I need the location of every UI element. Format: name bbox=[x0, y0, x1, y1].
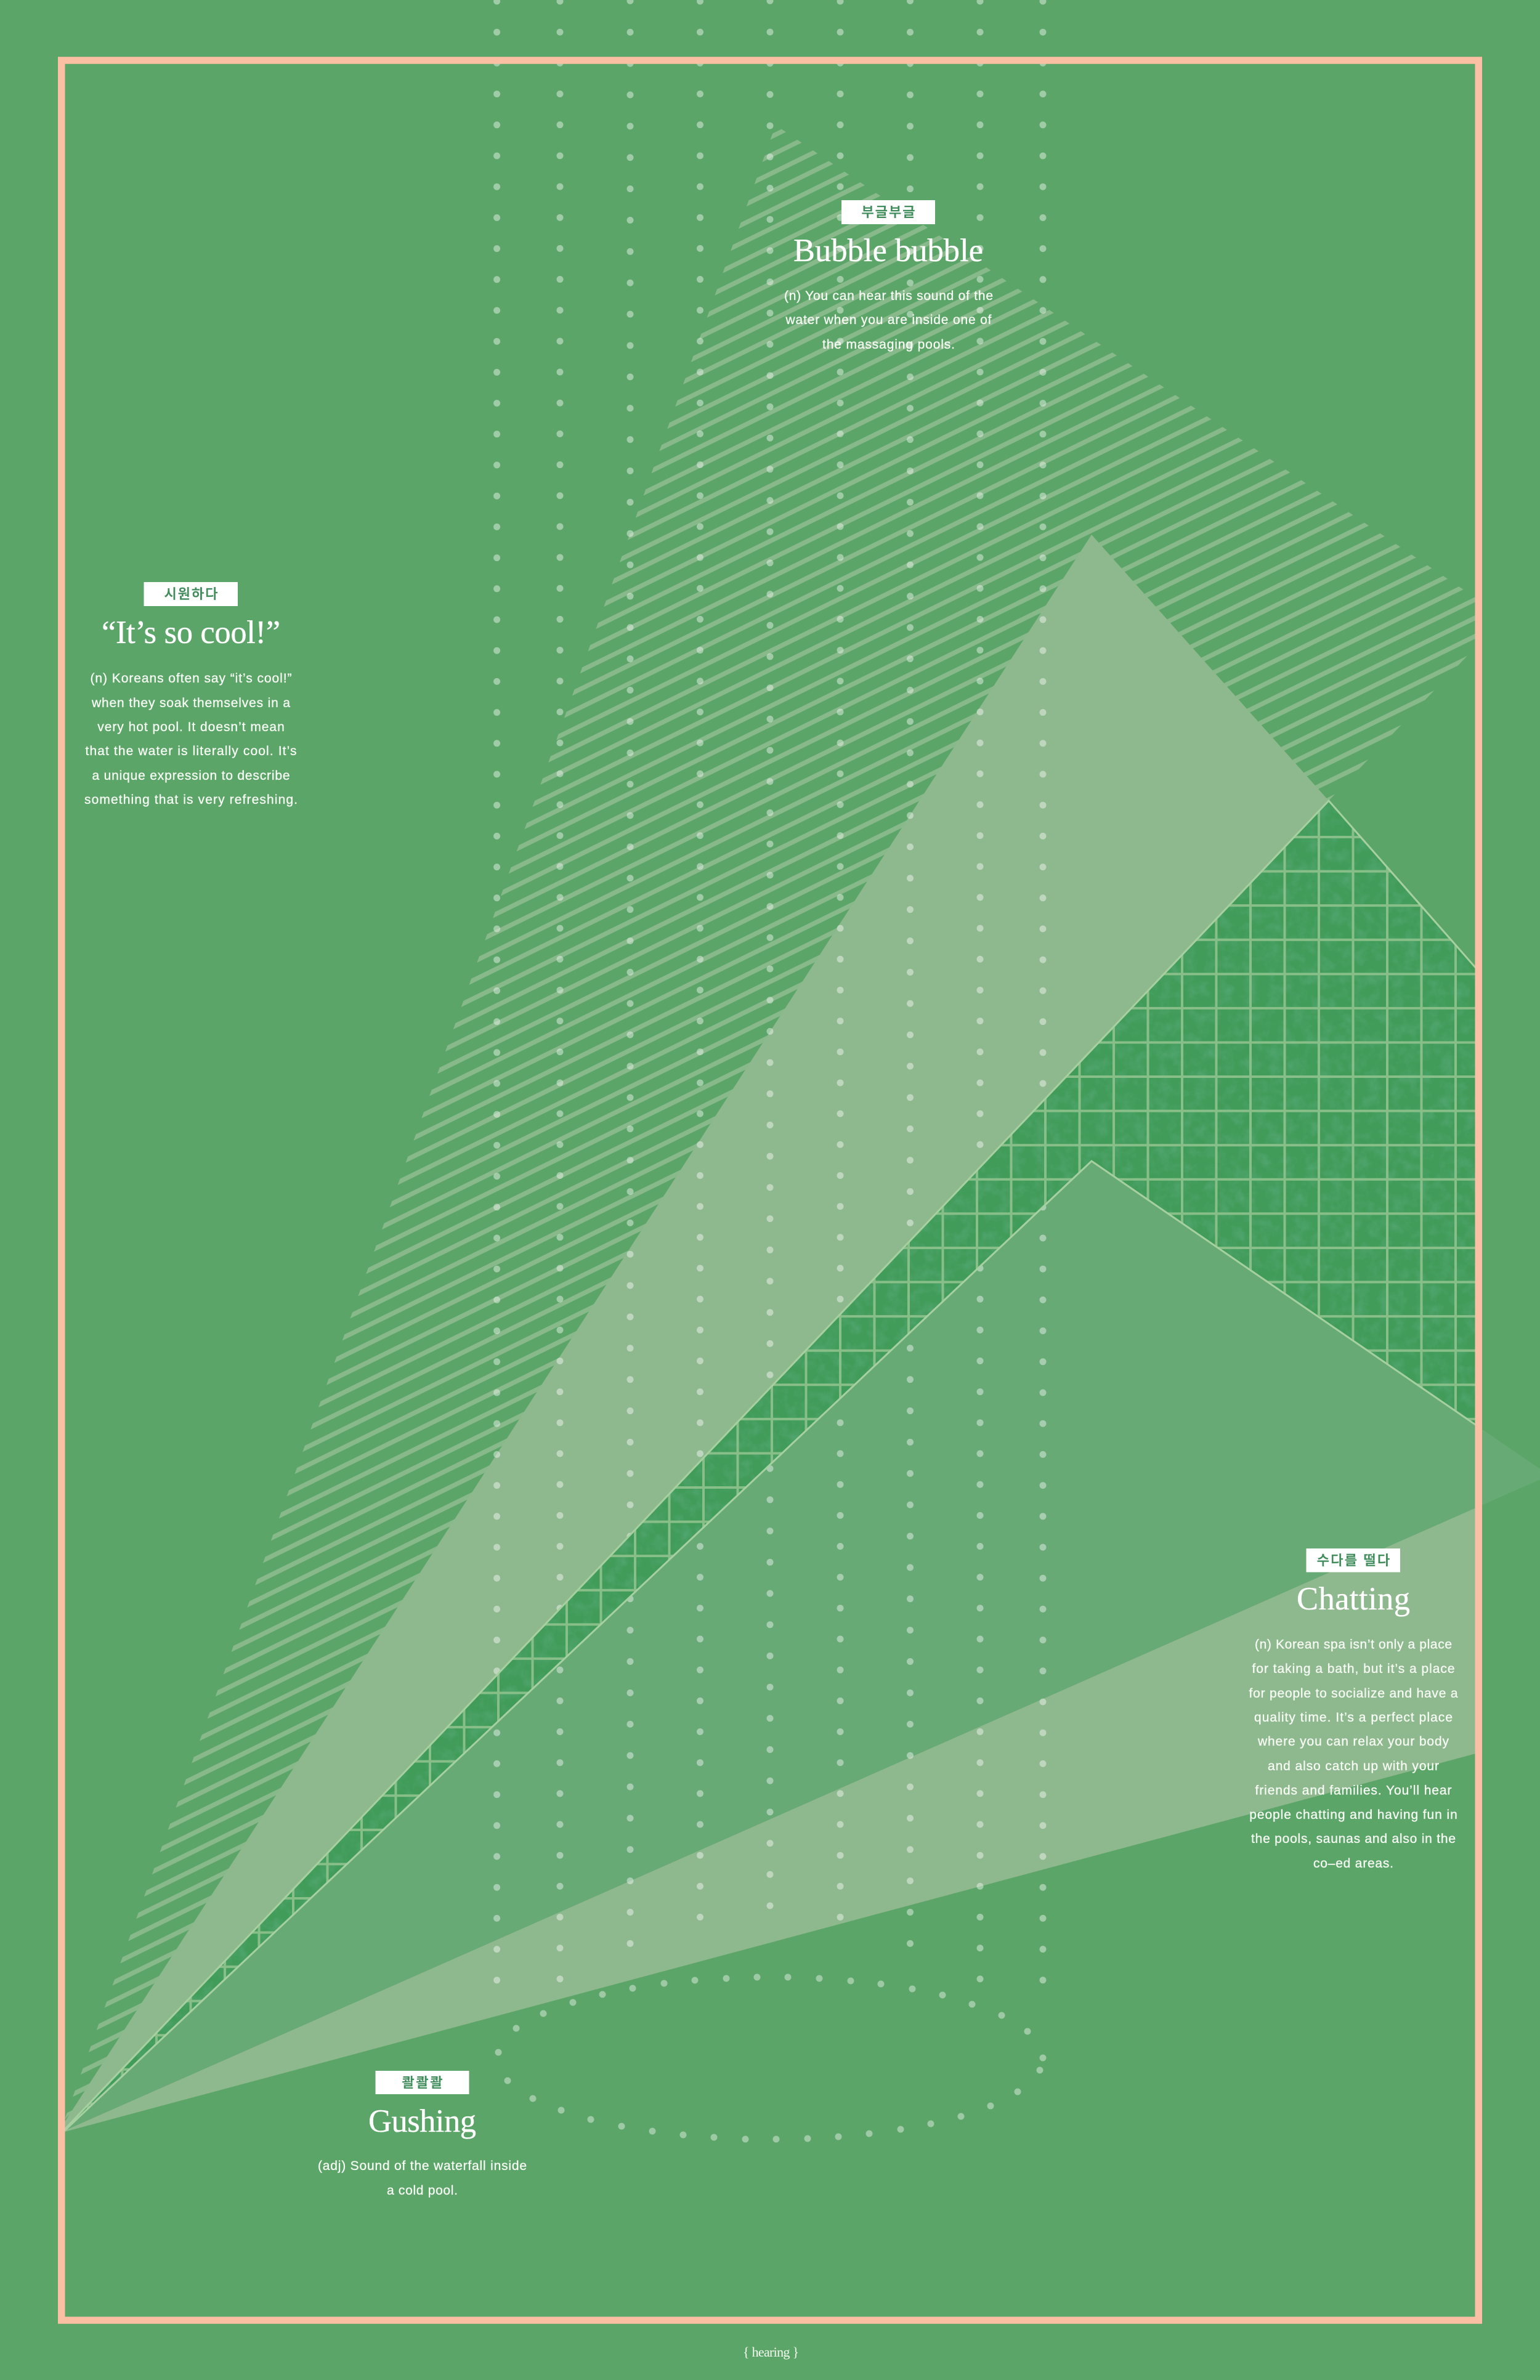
label: gushing in Korean bbox=[376, 2071, 469, 2094]
description: Chatting: quality time. It’s a perfect place bbox=[1254, 1710, 1453, 1725]
pale light beam bbox=[65, 1479, 1540, 2132]
text block: Gushing bbox=[318, 2071, 527, 2198]
label: gushing in Korean: 콸콸콸 bbox=[402, 2075, 442, 2091]
description: It's so cool: that the water is literally cool. It’s bbox=[85, 744, 297, 758]
label: cool in Korean: 시원하다 bbox=[164, 586, 218, 602]
label: bubbling in Korean bbox=[841, 200, 935, 224]
description: Chatting: people chatting and having fun in bbox=[1249, 1808, 1457, 1822]
description: Gushing bbox=[318, 2159, 527, 2198]
label: chatting in Korean bbox=[1306, 1548, 1400, 1572]
description: Chatting: the pools, saunas and also in the bbox=[1251, 1832, 1456, 1846]
tile grid triangle bbox=[62, 770, 1478, 2156]
description: It's so cool: something that is very refreshing. bbox=[84, 793, 298, 807]
description: Chatting: co–ed areas. bbox=[1313, 1856, 1393, 1871]
description: Chatting: (n) Korean spa isn’t only a place bbox=[1255, 1637, 1452, 1652]
text block: Bubble bubble bbox=[784, 200, 993, 352]
dotted pool loop bbox=[495, 1973, 1046, 2142]
dotted columns bbox=[497, 1, 1043, 2011]
text block: It's so cool bbox=[84, 582, 298, 807]
heading: Gushing: Gushing bbox=[368, 2103, 476, 2139]
description: Chatting: where you can relax your body bbox=[1257, 1734, 1449, 1749]
description: Bubble bubble: (n) You can hear this sound of the bbox=[784, 289, 993, 303]
description: It's so cool: a unique expression to describe bbox=[92, 769, 290, 783]
description: Chatting: for people to socialize and have a bbox=[1249, 1686, 1458, 1701]
heading: Chatting: Chatting bbox=[1297, 1581, 1410, 1617]
description: It's so cool bbox=[84, 671, 298, 807]
description: Chatting: and also catch up with your bbox=[1268, 1759, 1439, 1773]
description: Chatting bbox=[1249, 1637, 1458, 1871]
medium green triangle bbox=[65, 1161, 1540, 2131]
description: Chatting: for taking a bath, but it’s a place bbox=[1252, 1662, 1455, 1676]
label: bubbling in Korean: 부글부글 bbox=[861, 204, 915, 220]
description: Bubble bubble: water when you are inside one of bbox=[785, 313, 992, 327]
description: It's so cool: very hot pool. It doesn’t mean bbox=[97, 720, 285, 734]
hatched striped wedge bbox=[65, 129, 1475, 2119]
description: Chatting: friends and families. You’ll hear bbox=[1255, 1784, 1451, 1797]
label: chatting in Korean: 수다를 떨다 bbox=[1317, 1553, 1390, 1568]
heading: Bubble bubble: Bubble bubble bbox=[793, 233, 983, 269]
description: Gushing: (adj) Sound of the waterfall inside bbox=[318, 2159, 527, 2173]
description: It's so cool: (n) Koreans often say “it’s cool!” bbox=[90, 671, 292, 686]
description: Gushing: a cold pool. bbox=[387, 2184, 458, 2198]
text block: Chatting bbox=[1249, 1548, 1458, 1871]
triangle edge highlights bbox=[65, 801, 1540, 2131]
description: Bubble bubble: the massaging pools. bbox=[822, 338, 955, 352]
label: cool in Korean bbox=[144, 582, 238, 606]
description: Bubble bubble bbox=[784, 289, 993, 352]
description: It's so cool: when they soak themselves in a bbox=[91, 696, 290, 710]
footer: hearing: { hearing } bbox=[743, 2344, 799, 2360]
heading: It's so cool: “It’s so cool!” bbox=[102, 615, 280, 650]
pale solid triangle bbox=[65, 535, 1329, 2129]
